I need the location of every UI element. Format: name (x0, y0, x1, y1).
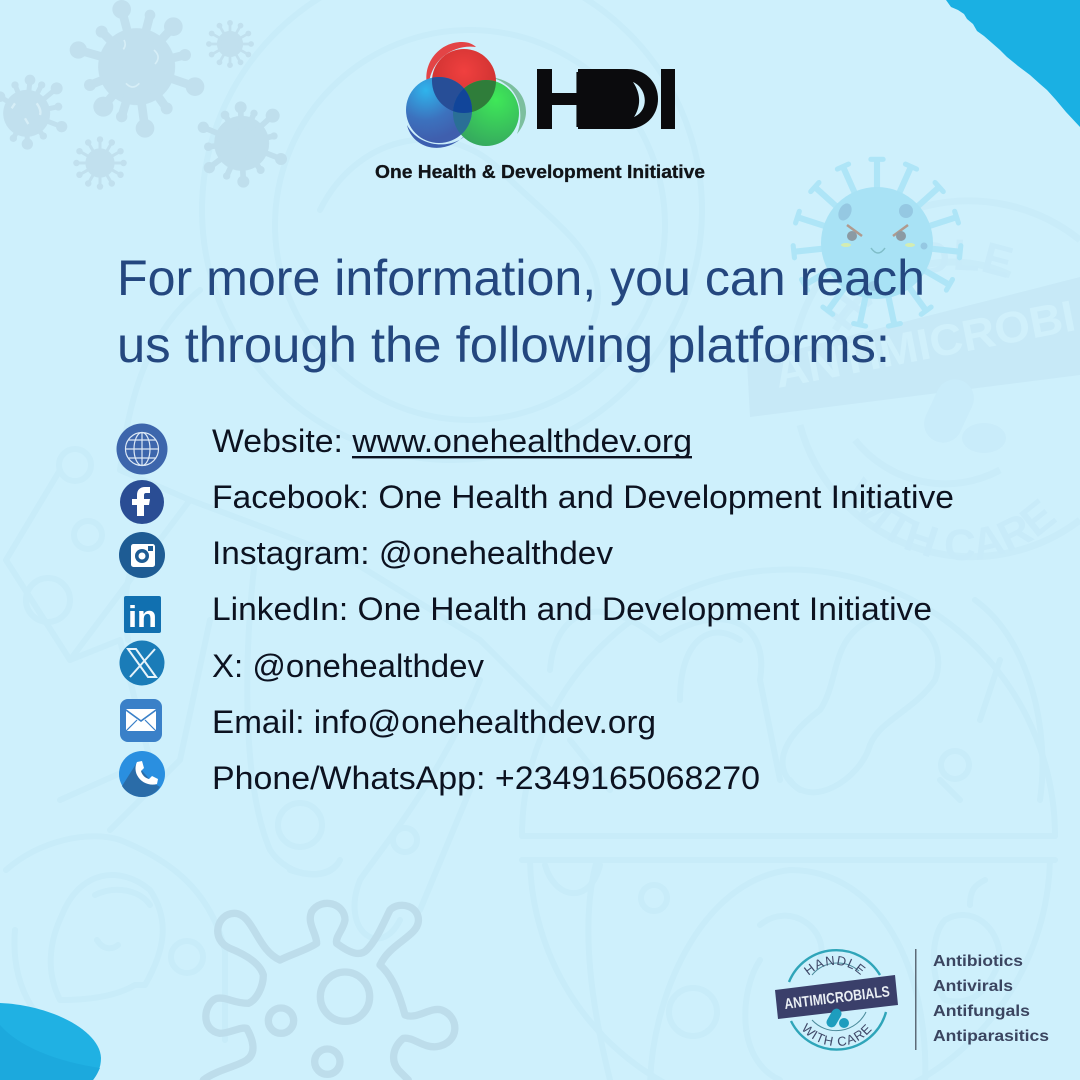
antimicrobial types list: Antivirals (933, 978, 1013, 995)
decorative virus: right (198, 101, 287, 188)
phone: Phone/WhatsApp: +2349165068270 (212, 760, 760, 796)
watermark: handle antimicrobials badge: ANTIMICROBI (771, 292, 1079, 398)
bottom left blue shape (0, 1003, 101, 1080)
decorative virus: small top (209, 23, 251, 65)
icon: facebook (120, 480, 164, 524)
logo: HDI wordmark (534, 55, 676, 144)
watermark: virus outline bottom left (203, 903, 455, 1080)
watermark: handle antimicrobials badge (747, 201, 1080, 570)
badge: handle antimicrobials with care (775, 949, 898, 1051)
badge: handle antimicrobials with care: HANDLE (804, 956, 866, 976)
email: Email: info@onehealthdev.org (212, 704, 656, 740)
icon: x (120, 640, 164, 686)
badge: handle antimicrobials with care: WITH CARE (802, 1022, 872, 1046)
antimicrobial types list: Antibiotics (933, 953, 1023, 970)
icon: globe (116, 424, 168, 474)
icon: instagram (119, 532, 165, 578)
heading (117, 250, 925, 373)
decorative virus: left (0, 75, 67, 150)
watermark: handle antimicrobials badge: HANDLE (816, 231, 1018, 339)
decorative virus: large (70, 0, 204, 138)
top right torn blue corner (946, 0, 1080, 127)
decorative virus: small bottom (76, 139, 124, 187)
heading: For more information, you can reach (117, 250, 925, 306)
x: X: @onehealthdev (212, 648, 484, 684)
icon: linkedin (124, 596, 161, 634)
antimicrobial types list (933, 953, 1049, 1045)
instagram: Instagram: @onehealthdev (212, 535, 613, 571)
cute angry virus (793, 159, 961, 326)
contact list (212, 423, 954, 796)
logo: HDI wordmark: H (534, 55, 594, 144)
linkedin: LinkedIn: One Health and Development Initiative (212, 591, 932, 627)
logo: HDI wordmark: I (660, 55, 676, 144)
watermark: handle antimicrobials badge: WITH CARE (833, 470, 1065, 570)
website: Website: www.onehealthdev.org (212, 423, 692, 459)
icon: email (120, 699, 162, 742)
logo: organisation name: One Health & Development Initiative (375, 161, 705, 182)
antimicrobial types list: Antiparasitics (933, 1028, 1049, 1045)
logo: three circles (406, 42, 526, 148)
divider line (915, 949, 916, 1050)
facebook: Facebook: One Health and Development Initiative (212, 479, 954, 515)
icon: phone (119, 751, 165, 797)
antimicrobial types list: Antifungals (933, 1003, 1030, 1020)
badge: handle antimicrobials with care: ANTIMICROBIALS (783, 983, 891, 1013)
icon: linkedin: in (128, 599, 157, 634)
heading: us through the following platforms: (117, 317, 890, 373)
logo: HDI wordmark: D (598, 55, 654, 144)
